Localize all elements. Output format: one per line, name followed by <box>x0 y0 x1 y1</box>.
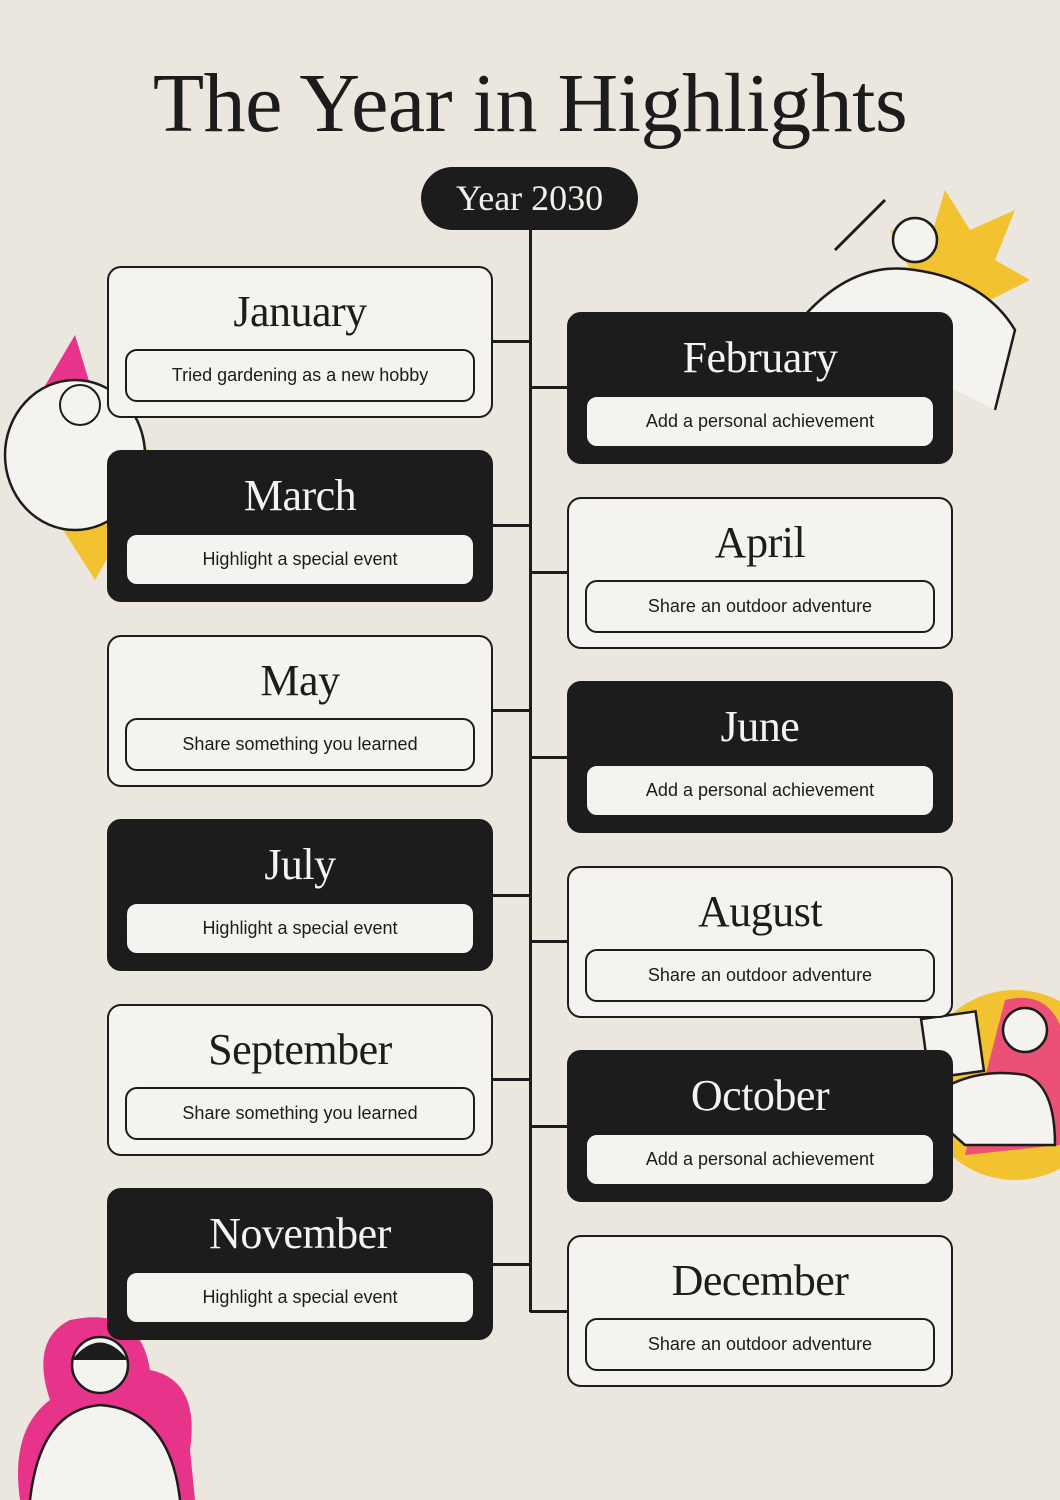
card: January: January <box>233 287 367 336</box>
card: December: December <box>672 1256 848 1305</box>
title: The Year in Highlights <box>153 57 907 150</box>
card: April <box>567 497 953 649</box>
card: May <box>107 635 493 787</box>
card: June: June <box>721 702 799 751</box>
card: May: Share something you learned <box>182 734 418 754</box>
card: February: February <box>683 333 837 382</box>
illustration: man thumbs up (top right) <box>806 190 1030 410</box>
card: March <box>107 450 493 602</box>
timeline spine <box>529 230 532 1312</box>
card: July: Highlight a special event <box>202 918 398 938</box>
card: November: November <box>209 1209 391 1258</box>
card: August <box>567 866 953 1018</box>
card: March: March <box>244 471 356 520</box>
card: March: Highlight a special event <box>202 549 398 569</box>
illustration: woman with paper (left top) <box>4 335 148 580</box>
card: November <box>107 1188 493 1340</box>
card: October: Add a personal achievement <box>646 1149 874 1169</box>
card: September <box>107 1004 493 1156</box>
card: January: Tried gardening as a new hobby <box>172 365 428 385</box>
card: December <box>567 1235 953 1387</box>
illustration: woman with book (right) <box>920 990 1060 1180</box>
card: November: Highlight a special event <box>202 1287 398 1307</box>
card: June: Add a personal achievement <box>646 780 874 800</box>
illustration: woman bottom left <box>18 1317 195 1500</box>
card: February: Add a personal achievement <box>646 411 874 431</box>
card: July: July <box>264 840 336 889</box>
card: September: September <box>208 1025 392 1074</box>
card: January <box>107 266 493 418</box>
card: April: April <box>715 518 805 567</box>
connectors <box>493 340 567 1313</box>
year pill <box>421 167 638 230</box>
card: August: August <box>698 887 822 936</box>
card: October <box>567 1050 953 1202</box>
card: April: Share an outdoor adventure <box>648 596 872 616</box>
year pill: Year 2030 <box>456 178 603 218</box>
card: July <box>107 819 493 971</box>
card: May: May <box>260 656 340 705</box>
card: August: Share an outdoor adventure <box>648 965 872 985</box>
card: June <box>567 681 953 833</box>
card: September: Share something you learned <box>182 1103 418 1123</box>
card: February <box>567 312 953 464</box>
card: October: October <box>691 1071 829 1120</box>
card: December: Share an outdoor adventure <box>648 1334 872 1354</box>
